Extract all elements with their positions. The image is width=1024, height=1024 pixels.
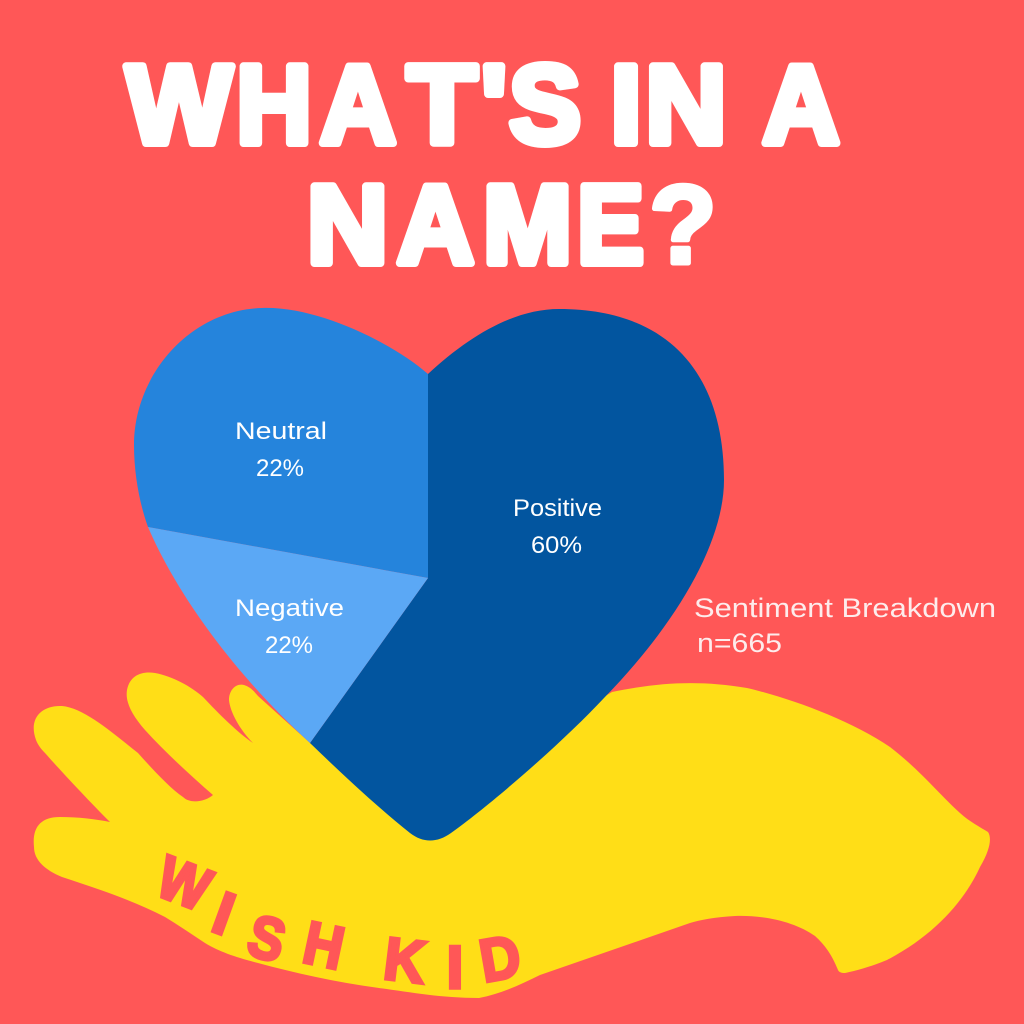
title: A — [320, 43, 396, 167]
caption: sentiment breakdown: Sentiment Breakdown — [694, 593, 996, 623]
title: S — [509, 44, 581, 167]
wish kid lettering: K — [380, 925, 429, 997]
title: A — [763, 44, 839, 167]
caption: sentiment breakdown — [694, 593, 996, 658]
wish kid lettering: S — [241, 901, 293, 975]
title: ? — [649, 164, 717, 287]
title: T — [407, 43, 477, 167]
title: N — [307, 163, 388, 287]
label: negative — [235, 595, 344, 659]
title: W — [126, 43, 233, 167]
wish kid lettering: I — [205, 879, 243, 948]
heart pie chart — [134, 308, 724, 840]
title: H — [236, 42, 312, 167]
title: E — [577, 163, 644, 287]
wish kid lettering: W — [148, 843, 220, 925]
slice: neutral — [134, 308, 428, 578]
title — [126, 42, 839, 287]
label: positive — [513, 495, 602, 559]
icon: yellow hand — [34, 673, 990, 998]
label: positive: 60% — [531, 532, 582, 559]
wish kid lettering — [148, 843, 526, 1001]
caption: sentiment breakdown: n=665 — [697, 628, 782, 658]
wish kid lettering: H — [298, 909, 350, 983]
slice: positive — [310, 309, 724, 840]
title: N — [646, 43, 726, 167]
title: A — [397, 164, 474, 287]
label: neutral: 22% — [256, 455, 304, 482]
slice: negative — [148, 527, 428, 743]
label: negative: Negative — [235, 595, 344, 622]
label: neutral: Neutral — [235, 418, 327, 445]
title: M — [483, 164, 572, 287]
wish kid lettering: D — [475, 923, 526, 995]
title: ' — [481, 43, 507, 167]
label: positive: Positive — [513, 495, 602, 522]
title: I — [611, 43, 641, 167]
label: negative: 22% — [265, 632, 313, 659]
label: neutral — [235, 418, 327, 482]
wish kid lettering: I — [447, 934, 463, 1001]
